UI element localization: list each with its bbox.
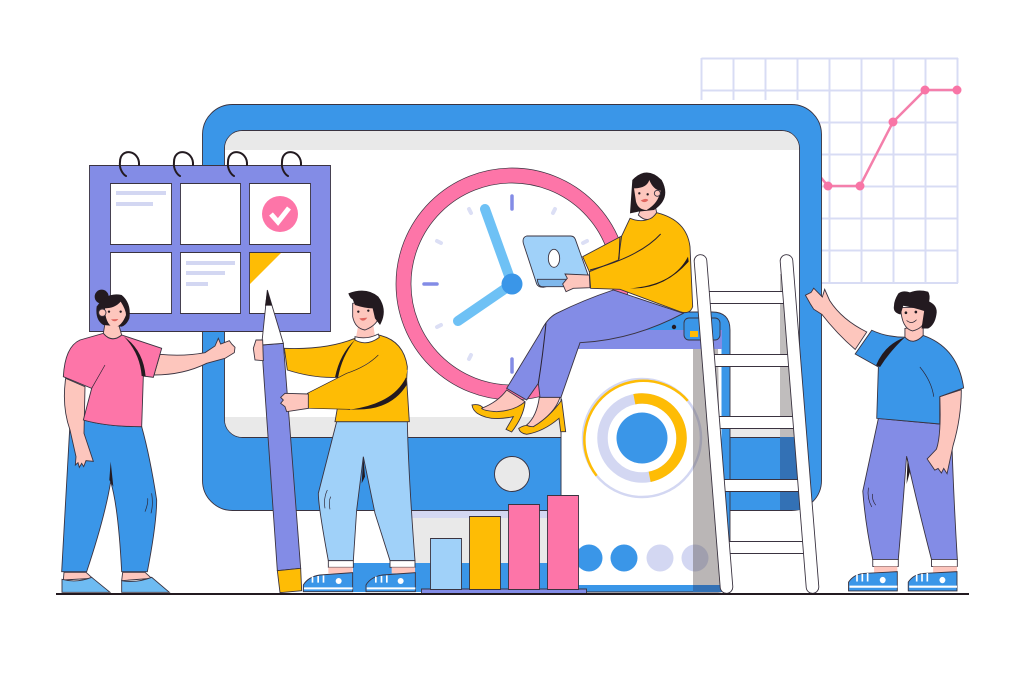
pink woman trousers <box>62 420 157 572</box>
woman sweater <box>589 213 693 313</box>
pencil wood tip <box>262 290 283 345</box>
pagination dots <box>576 544 708 572</box>
chart trend line <box>818 86 962 190</box>
clock hub <box>502 274 522 294</box>
clock tick marks <box>424 196 587 372</box>
ladder left rail <box>700 261 726 587</box>
calendar <box>90 152 330 332</box>
blue man head <box>894 290 937 331</box>
yellow man sweater <box>335 335 409 422</box>
woman back arm <box>583 236 622 272</box>
device casing <box>561 312 730 592</box>
bar 1 <box>430 538 462 590</box>
blue man socks <box>873 559 957 573</box>
ladder rungs <box>703 292 809 554</box>
wall clock <box>396 168 628 400</box>
ladder right rail <box>786 261 812 587</box>
calendar rings <box>120 152 301 176</box>
yellow man back arm and hand <box>253 338 355 377</box>
monitor screen <box>224 130 803 510</box>
monitor <box>202 104 822 592</box>
person: man in yellow sweater <box>253 291 415 592</box>
bar chart baseline <box>422 589 586 594</box>
person: woman sitting with tablet <box>472 172 693 434</box>
yellow man socks <box>328 561 415 573</box>
monitor stand base <box>353 563 556 592</box>
pink woman neck <box>103 323 122 339</box>
pencil lead <box>265 290 272 306</box>
device shade <box>693 349 722 585</box>
yellow man head <box>348 291 384 330</box>
yellow man sneakers <box>303 573 415 592</box>
icon: check badge <box>262 196 298 232</box>
monitor power button <box>494 456 530 492</box>
bar 4 <box>548 496 578 590</box>
device screen <box>562 349 722 585</box>
woman head <box>630 172 665 213</box>
yellow man trousers <box>318 422 415 561</box>
ground line <box>56 593 969 595</box>
calendar board <box>90 166 330 332</box>
blue man raised arm <box>805 288 867 349</box>
calendar cells <box>110 184 310 314</box>
pink woman shirt <box>63 333 162 427</box>
blue man sneakers <box>849 572 957 591</box>
bar 2 <box>470 516 500 590</box>
woman heels <box>472 400 566 434</box>
yellow man front arm <box>307 355 407 409</box>
blue man shirt <box>855 330 964 424</box>
pencil end cap <box>277 568 302 593</box>
woman hand <box>563 274 590 292</box>
ladder <box>700 261 812 587</box>
line chart on grid <box>702 58 962 283</box>
tablet device <box>561 312 730 592</box>
woman neck <box>638 205 657 219</box>
monitor frame <box>202 104 822 510</box>
yellow man neck and collar <box>355 325 379 343</box>
pink woman extended arm <box>154 338 235 375</box>
pink woman head <box>95 290 130 328</box>
woman tablet <box>523 236 589 287</box>
pencil body <box>262 343 301 571</box>
clock ring <box>404 176 620 392</box>
yellow man hand <box>281 393 308 412</box>
pink woman lowered arm <box>64 378 93 467</box>
woman trousers <box>507 290 683 400</box>
donut chart <box>583 379 701 497</box>
person: woman in pink shirt <box>62 290 235 592</box>
clock hands <box>458 209 512 321</box>
device top strip <box>566 330 722 349</box>
blue man neck <box>905 325 923 341</box>
blue man trousers <box>863 418 957 559</box>
pencil <box>262 290 302 593</box>
bar 3 <box>508 504 540 590</box>
monitor stand neck <box>408 510 556 563</box>
bar chart <box>422 496 586 594</box>
person: man in blue shirt <box>805 288 964 591</box>
pink woman feet <box>62 572 169 592</box>
blue man lowered arm <box>927 390 961 474</box>
device notch <box>672 318 720 340</box>
woman feet <box>482 390 560 427</box>
chart grid <box>702 58 958 283</box>
